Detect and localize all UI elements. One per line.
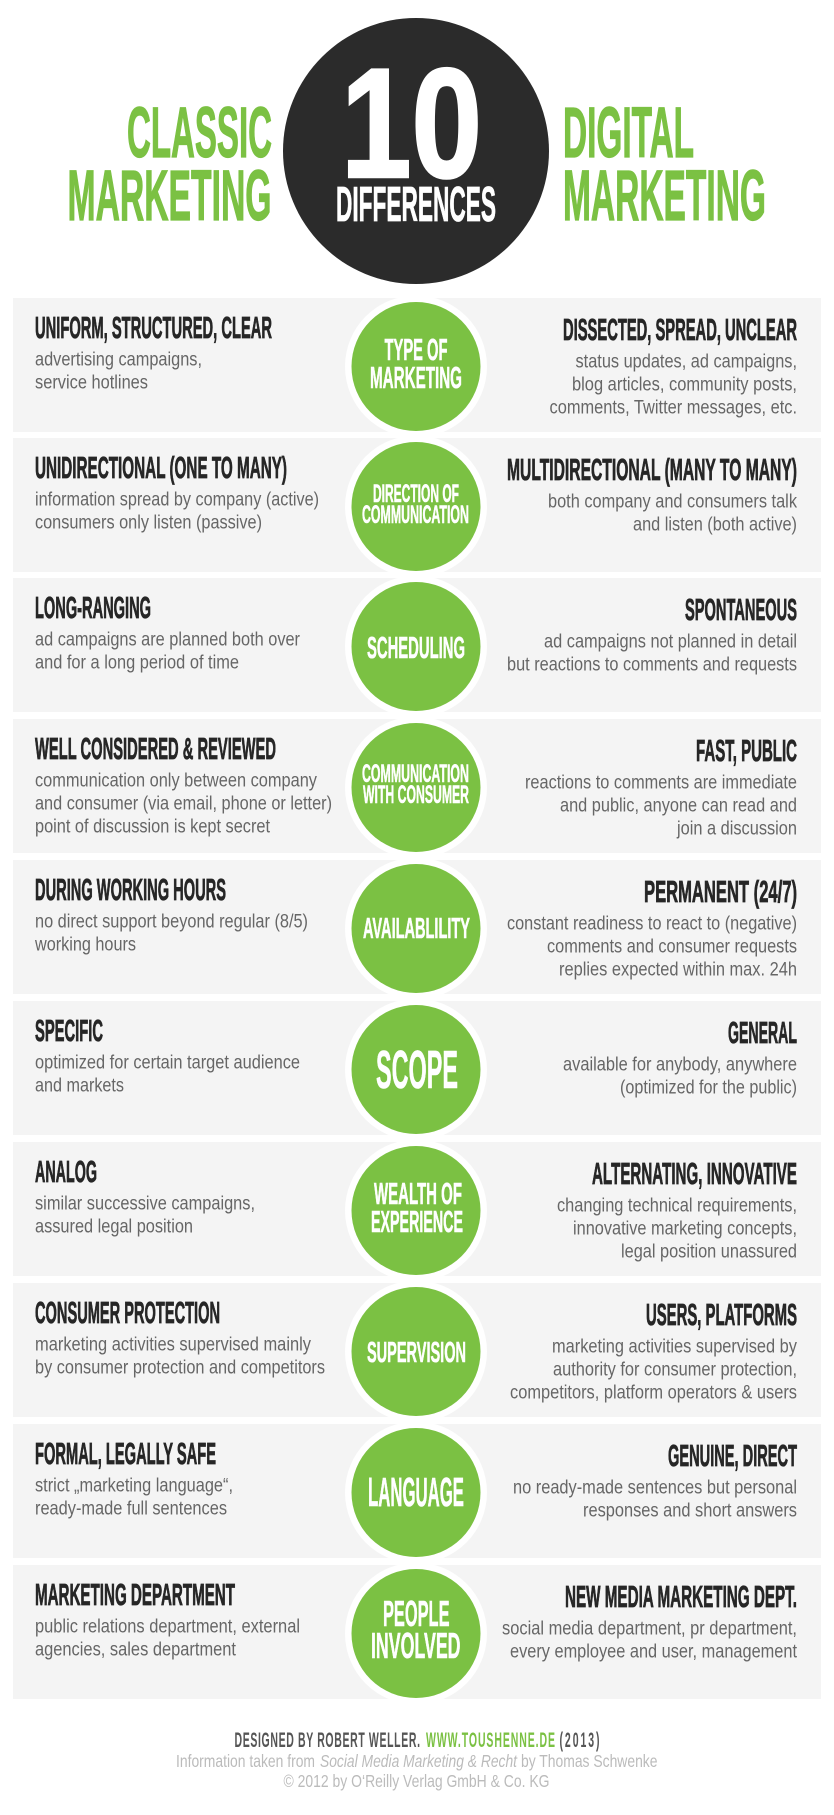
- left column: classic: DURING WORKING HOURS: [35, 872, 226, 907]
- panel: type of marketing: [13, 296, 821, 438]
- green circle: communication with consumer: COMMUNICATION: [362, 760, 469, 788]
- left column: classic: marketing activities supervised mainly: [35, 1334, 311, 1356]
- right column: digital: innovative marketing concepts,: [573, 1218, 797, 1240]
- panel: communication with consumer: [13, 716, 821, 858]
- right column: digital: [507, 452, 797, 536]
- right column: digital: and public, anyone can read and: [560, 796, 797, 816]
- left column: classic: agencies, sales department: [35, 1640, 237, 1660]
- left column: classic: communication only between company: [35, 770, 317, 792]
- right column: digital: comments, Twitter messages, etc.: [550, 398, 797, 418]
- green circle: direction of communication: COMMUNICATION: [362, 501, 469, 529]
- green circle: type of marketing: [345, 296, 487, 438]
- green circle: people involved: [345, 1562, 487, 1704]
- right column: digital: [502, 1579, 798, 1662]
- dark circle: 10 differences: [283, 18, 549, 284]
- right column: digital: authority for consumer protection,: [553, 1360, 797, 1380]
- right column: digital: social media department, pr department,: [502, 1618, 797, 1640]
- green circle: availablility: AVAILABLILITY: [363, 913, 470, 945]
- right column: digital: ad campaigns not planned in detail: [544, 632, 797, 652]
- left column: classic: advertising campaigns,: [35, 350, 202, 370]
- header: [68, 18, 766, 284]
- credit line: [234, 1728, 600, 1752]
- left column: classic: MARKETING DEPARTMENT: [35, 1577, 235, 1612]
- right column: digital: [507, 592, 797, 676]
- left column: classic: [35, 450, 319, 534]
- right column: digital: [507, 874, 797, 980]
- right column: digital: replies expected within max. 24h: [559, 960, 797, 980]
- green circle: scope: [345, 998, 487, 1140]
- left column: classic: ANALOG: [35, 1154, 97, 1189]
- panel: type of marketing: UNIFORM, STRUCTURED, CLEAR: [35, 310, 272, 345]
- green circle: wealth of experience: EXPERIENCE: [371, 1204, 463, 1239]
- left column: classic: ready-made full sentences: [35, 1498, 227, 1520]
- panel: scope: [13, 998, 821, 1140]
- left column: classic: working hours: [34, 934, 136, 956]
- left column: classic: assured legal position: [35, 1216, 193, 1238]
- green circle: type of marketing: TYPE OF: [384, 332, 448, 367]
- left column: classic: information spread by company (active): [35, 490, 319, 510]
- green circle: direction of communication: [345, 436, 487, 578]
- right column: digital: [563, 1015, 797, 1098]
- left column: classic: [35, 590, 301, 674]
- green circle: language: [345, 1422, 487, 1564]
- source line: Information taken from: [176, 1751, 315, 1771]
- left column: classic: strict „marketing language“,: [35, 1476, 233, 1496]
- green circle: type of marketing: MARKETING: [370, 360, 462, 395]
- left column: classic: no direct support beyond regular (8/5): [35, 912, 308, 932]
- left column: classic: SPECIFIC: [35, 1013, 103, 1048]
- right column: digital: comments and consumer requests: [547, 936, 797, 958]
- header: MARKETING: [68, 157, 272, 236]
- right column: digital: responses and short answers: [583, 1500, 797, 1522]
- right column: digital: [550, 312, 797, 418]
- left column: classic: [35, 310, 272, 394]
- green circle: language: LANGUAGE: [368, 1469, 464, 1515]
- copyright line: © 2012 by O‘Reilly Verlag GmbH & Co. KG: [284, 1771, 550, 1791]
- right column: digital: marketing activities supervised by: [552, 1336, 797, 1358]
- right column: digital: blog articles, community posts,: [572, 374, 797, 396]
- left column: classic: similar successive campaigns,: [35, 1194, 255, 1214]
- green circle: direction of communication: DIRECTION OF: [373, 480, 459, 508]
- right column: digital: join a discussion: [676, 818, 797, 840]
- left column: classic: [35, 1013, 300, 1096]
- title: classic marketing: [68, 94, 272, 236]
- right column: digital: no ready-made sentences but personal: [513, 1478, 797, 1498]
- right column: digital: every employee and user, management: [510, 1642, 798, 1662]
- green circle: scope: SCOPE: [376, 1040, 458, 1100]
- left column: classic: [34, 872, 308, 956]
- right column: digital: [510, 1297, 797, 1404]
- right column: digital: both company and consumers talk: [548, 492, 797, 512]
- footer: [176, 1728, 658, 1791]
- left column: classic: CONSUMER PROTECTION: [35, 1295, 220, 1330]
- right column: digital: and listen (both active): [633, 514, 797, 536]
- left column: classic: and consumer (via email, phone or letter): [35, 794, 332, 814]
- right column: digital: competitors, platform operators & users: [510, 1382, 797, 1404]
- right column: digital: (optimized for the public): [620, 1078, 797, 1098]
- green circle: people involved: PEOPLE: [383, 1593, 450, 1634]
- left column: classic: UNIDIRECTIONAL (ONE TO MANY): [35, 450, 287, 485]
- credit line: WWW.TOUSHENNE.DE: [426, 1728, 555, 1752]
- right column: digital: status updates, ad campaigns,: [576, 352, 797, 372]
- dark circle: 10 differences: DIFFERENCES: [336, 178, 496, 232]
- right column: digital: [525, 733, 797, 840]
- left column: classic: [35, 1295, 325, 1378]
- panel: language: [13, 1422, 821, 1564]
- left column: classic: FORMAL, LEGALLY SAFE: [35, 1436, 216, 1471]
- left column: classic: and for a long period of time: [35, 652, 239, 674]
- panel: scheduling: [13, 576, 821, 718]
- left column: classic: consumers only listen (passive): [35, 512, 262, 534]
- right column: digital: reactions to comments are immediate: [525, 772, 797, 794]
- left column: classic: by consumer protection and competitors: [35, 1358, 325, 1378]
- panel: wealth of experience: [13, 1140, 821, 1282]
- green circle: scheduling: SCHEDULING: [367, 630, 465, 665]
- left column: classic: ad campaigns are planned both over: [35, 630, 301, 650]
- right column: digital: [557, 1156, 797, 1262]
- source line: Social Media Marketing & Recht: [320, 1751, 518, 1771]
- source line: by Thomas Schwenke: [521, 1751, 658, 1771]
- dark circle: 10 differences: 10: [341, 37, 482, 211]
- header: CLASSIC: [127, 94, 272, 173]
- green circle: communication with consumer: [345, 716, 487, 858]
- left column: classic: WELL CONSIDERED & REVIEWED: [35, 731, 276, 766]
- green circle: people involved: INVOLVED: [371, 1625, 460, 1666]
- right column: digital: [513, 1438, 797, 1522]
- left column: classic: point of discussion is kept secret: [35, 816, 271, 838]
- green circle: wealth of experience: [345, 1140, 487, 1282]
- panel: direction of communication: [13, 436, 821, 578]
- left column: classic: and markets: [35, 1076, 124, 1096]
- left column: classic: [35, 1436, 233, 1520]
- title: digital marketing: DIGITAL: [563, 94, 694, 173]
- right column: digital: available for anybody, anywhere: [563, 1054, 797, 1076]
- left column: classic: public relations department, external: [35, 1616, 300, 1638]
- right column: digital: changing technical requirements,: [557, 1196, 797, 1216]
- green circle: supervision: [345, 1280, 487, 1422]
- left column: classic: LONG-RANGING: [35, 590, 151, 625]
- left column: classic: service hotlines: [35, 372, 148, 394]
- credit line: DESIGNED BY ROBERT WELLER.: [234, 1728, 420, 1752]
- green circle: communication with consumer: WITH CONSUMER: [363, 781, 469, 809]
- panel: people involved: [13, 1562, 821, 1704]
- green circle: scheduling: [345, 576, 487, 718]
- left column: classic: optimized for certain target audience: [35, 1052, 300, 1074]
- left column: classic: [35, 1154, 255, 1238]
- green circle: supervision: SUPERVISION: [367, 1337, 466, 1369]
- green circle: wealth of experience: WEALTH OF: [374, 1176, 462, 1211]
- credit line: (2013): [560, 1728, 599, 1752]
- panel: availability: [13, 858, 821, 1000]
- right column: digital: legal position unassured: [621, 1242, 797, 1262]
- left column: classic: [35, 1577, 300, 1660]
- green circle: availablility: [345, 858, 487, 1000]
- source line: [176, 1751, 658, 1771]
- title: digital marketing: [563, 94, 766, 236]
- panel: supervision: [13, 1280, 821, 1422]
- left column: classic: [35, 731, 332, 838]
